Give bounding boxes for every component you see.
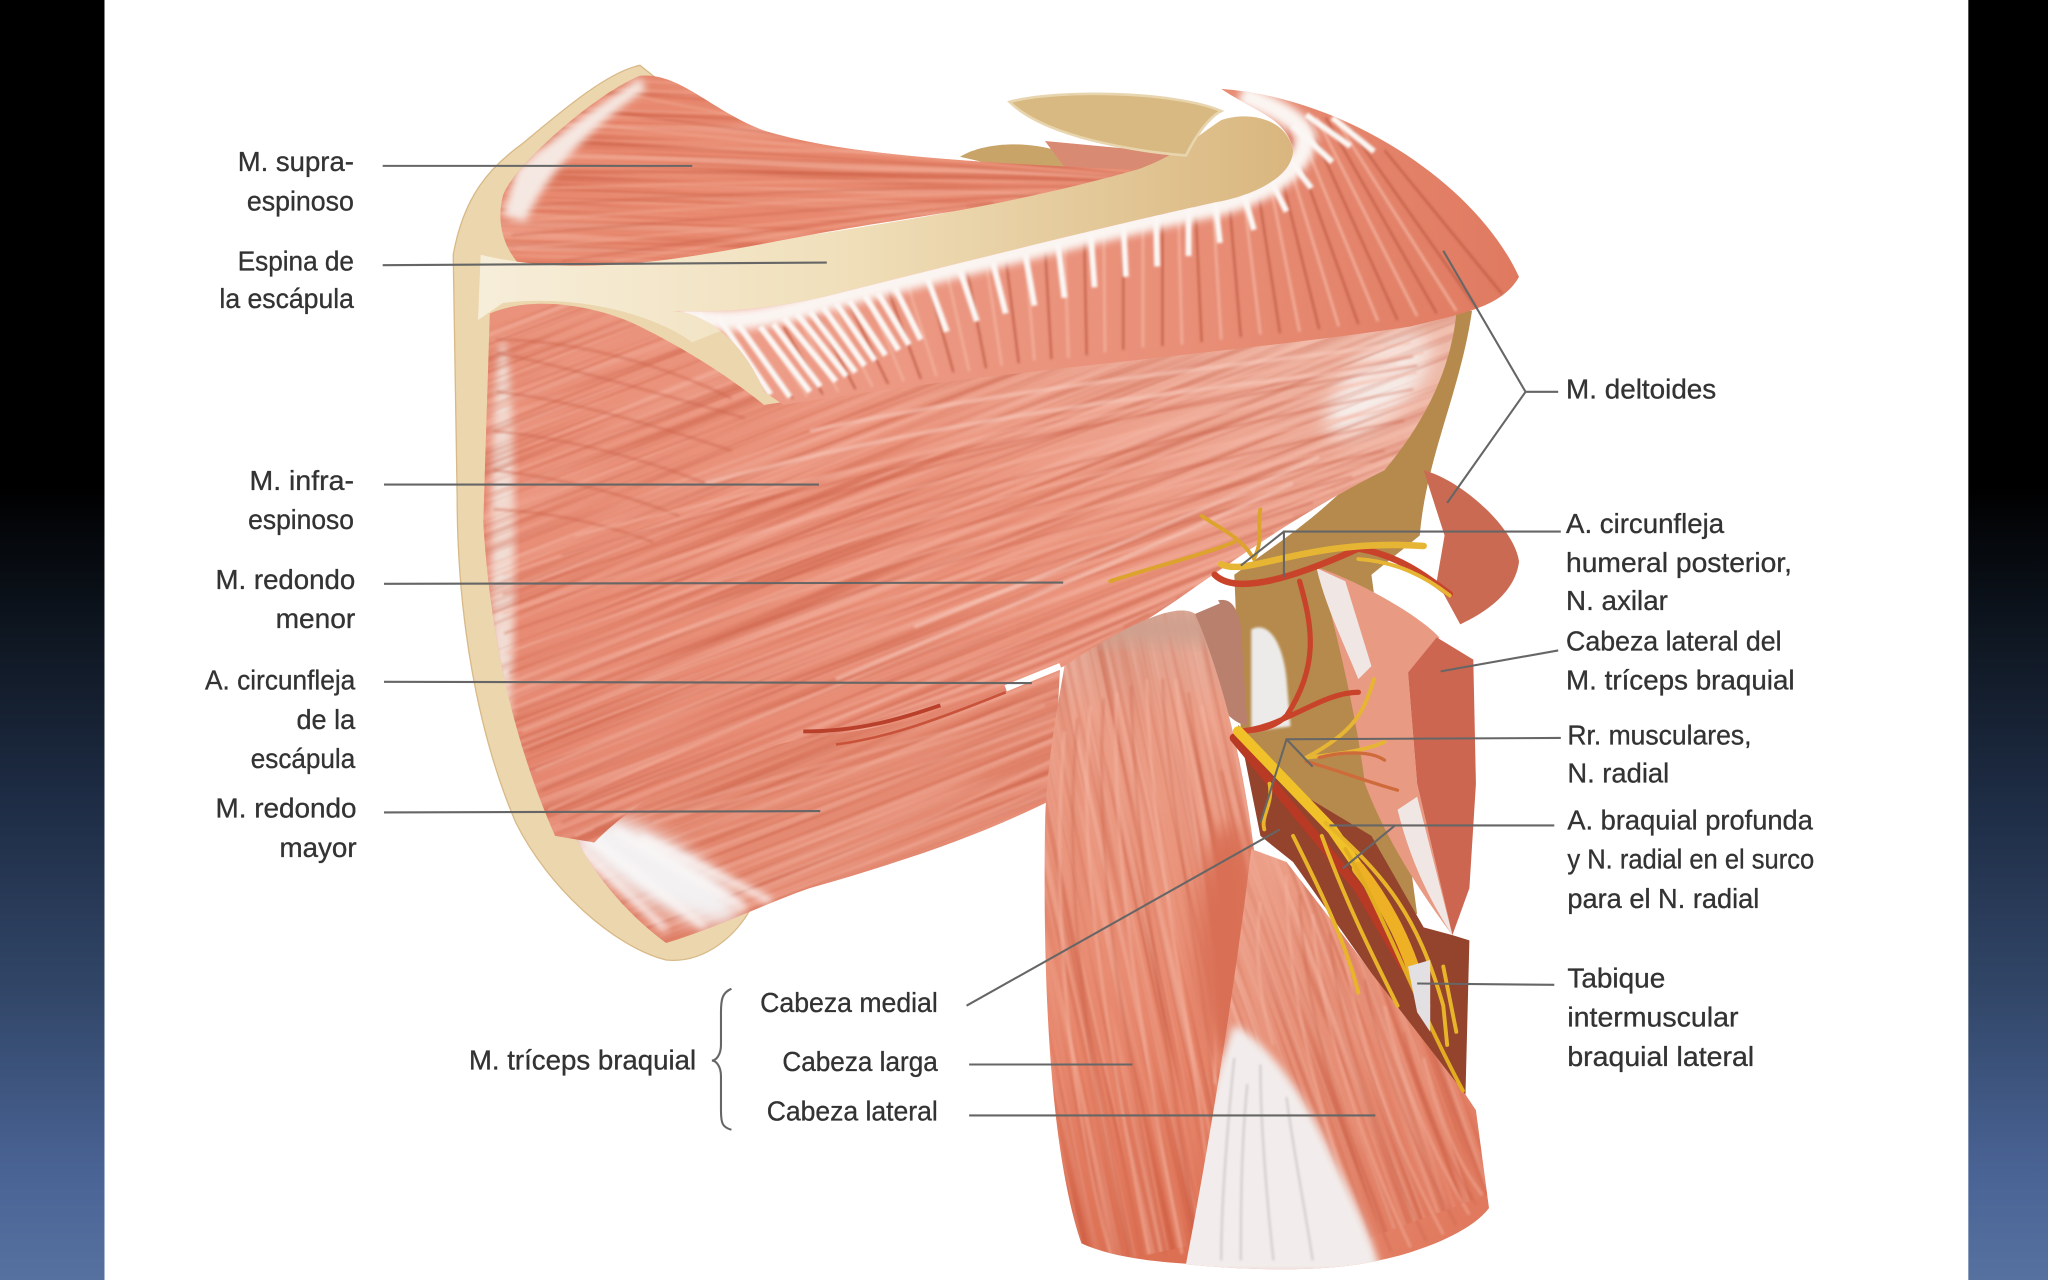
label: A. circunfleja humeral posterior, N. axilar <box>1241 508 1792 616</box>
vessel: circumflex scapular artery <box>803 666 1061 744</box>
label: A. circunfleja de la escápula: A. circunfleja <box>205 665 356 696</box>
label: Cabeza lateral del M. tríceps braquial: Cabeza lateral del <box>1566 625 1782 656</box>
label: M. redondo menor: M. redondo <box>216 564 355 595</box>
muscle: infraspinatus and teres minor <box>483 304 1456 842</box>
label: Cabeza larga: Cabeza larga <box>782 1046 939 1077</box>
muscle: small portion under the acromion <box>1045 141 1186 175</box>
vessels and nerves: axillary region <box>1110 509 1450 596</box>
bone: humeral head behind supraspinatus <box>960 144 1091 176</box>
label: M. redondo mayor: mayor <box>280 832 357 863</box>
label: M. deltoides: M. deltoides <box>1566 373 1716 404</box>
groove: radial nerve sulcus <box>1238 725 1469 1095</box>
muscle: triceps long head <box>1044 610 1254 1264</box>
label: Tabique intermuscular braquial lateral <box>1417 962 1754 1072</box>
label: Cabeza lateral: Cabeza lateral <box>767 1096 938 1127</box>
label: A. braquial profunda y N. radial en el surco: y N. radial en el surco <box>1567 844 1814 875</box>
label: A. circunfleja de la escápula: de la <box>296 704 356 735</box>
septum: lateral intermuscular <box>1408 960 1430 1032</box>
label: A. braquial profunda y N. radial en el surco: A. braquial profunda <box>1567 804 1814 835</box>
label: M. tríceps braquial with brace <box>469 989 731 1130</box>
tendon: white patch on humerus <box>1251 627 1290 731</box>
label: M. redondo menor: menor <box>276 603 355 634</box>
label: A. circunfleja de la escápula: escápula <box>251 743 356 774</box>
muscle: triceps lateral head, upper part <box>1317 568 1452 935</box>
label: Cabeza medial <box>760 829 1280 1018</box>
label: M. tríceps braquial with brace: M. tríceps braquial <box>469 1045 696 1076</box>
label: M. infraespinoso <box>248 465 819 535</box>
bone: acromion and clavicle <box>1010 94 1221 155</box>
label: M. redondo mayor <box>216 793 820 863</box>
label: A. circunfleja humeral posterior, N. axilar: A. circunfleja <box>1566 508 1725 539</box>
label: Tabique intermuscular braquial lateral: braquial lateral <box>1567 1041 1754 1072</box>
label: M. supraespinoso: M. supra- <box>238 146 354 177</box>
tendon: triceps common tendon <box>1176 1025 1382 1273</box>
label: Espina de la escápula: la escápula <box>219 283 355 314</box>
label: A. braquial profunda y N. radial en el surco: para el N. radial <box>1567 883 1759 914</box>
bone: humerus <box>1234 311 1472 914</box>
label: A. braquial profunda y N. radial en el surco <box>1330 804 1814 914</box>
label: A. circunfleja humeral posterior, N. axilar: humeral posterior, <box>1566 547 1792 578</box>
label: Rr. musculares, N. radial <box>1260 719 1752 823</box>
label: M. supraespinoso: espinoso <box>247 185 354 216</box>
label: Cabeza lateral del M. tríceps braquial <box>1441 625 1795 696</box>
label: A. circunfleja humeral posterior, N. axilar: N. axilar <box>1566 585 1668 616</box>
label: M. infraespinoso: espinoso <box>248 504 354 535</box>
muscle: supraspinatus <box>500 76 1134 266</box>
label: Tabique intermuscular braquial lateral: Tabique <box>1567 962 1665 993</box>
label: Cabeza lateral del M. tríceps braquial: M. tríceps braquial <box>1566 665 1795 696</box>
label: Cabeza medial: Cabeza medial <box>760 987 938 1018</box>
label: Rr. musculares, N. radial: Rr. musculares, <box>1567 719 1752 750</box>
label: Tabique intermuscular braquial lateral: intermuscular <box>1567 1002 1738 1033</box>
muscle: teres major <box>576 670 1060 943</box>
label: M. redondo mayor: M. redondo <box>216 793 357 824</box>
label: M. supraespinoso <box>238 146 692 216</box>
label: M. infraespinoso: M. infra- <box>249 465 354 496</box>
label: A. circunfleja de la escápula <box>205 665 1032 774</box>
gap between muscles <box>1182 585 1220 614</box>
illustration: posterior shoulder anatomy <box>452 64 1519 1270</box>
vessels and nerves: radial groove <box>1234 581 1463 1091</box>
label: Espina de la escápula: Espina de <box>238 245 354 276</box>
bone: scapula <box>453 65 784 960</box>
label: Rr. musculares, N. radial: N. radial <box>1567 757 1669 788</box>
muscle: teres deep portion <box>1191 600 1247 725</box>
muscle: triceps lateral head <box>1186 849 1489 1270</box>
label: Espina de la escápula <box>219 245 827 314</box>
label: M. deltoides <box>1443 251 1716 503</box>
label: M. redondo menor <box>216 564 1063 634</box>
bone: spine of the scapula <box>478 116 1293 342</box>
muscle: deltoid posterior lobe <box>1424 470 1519 624</box>
muscle: deltoid <box>669 89 1519 405</box>
muscle: cut surface of the lateral head <box>1408 637 1476 935</box>
